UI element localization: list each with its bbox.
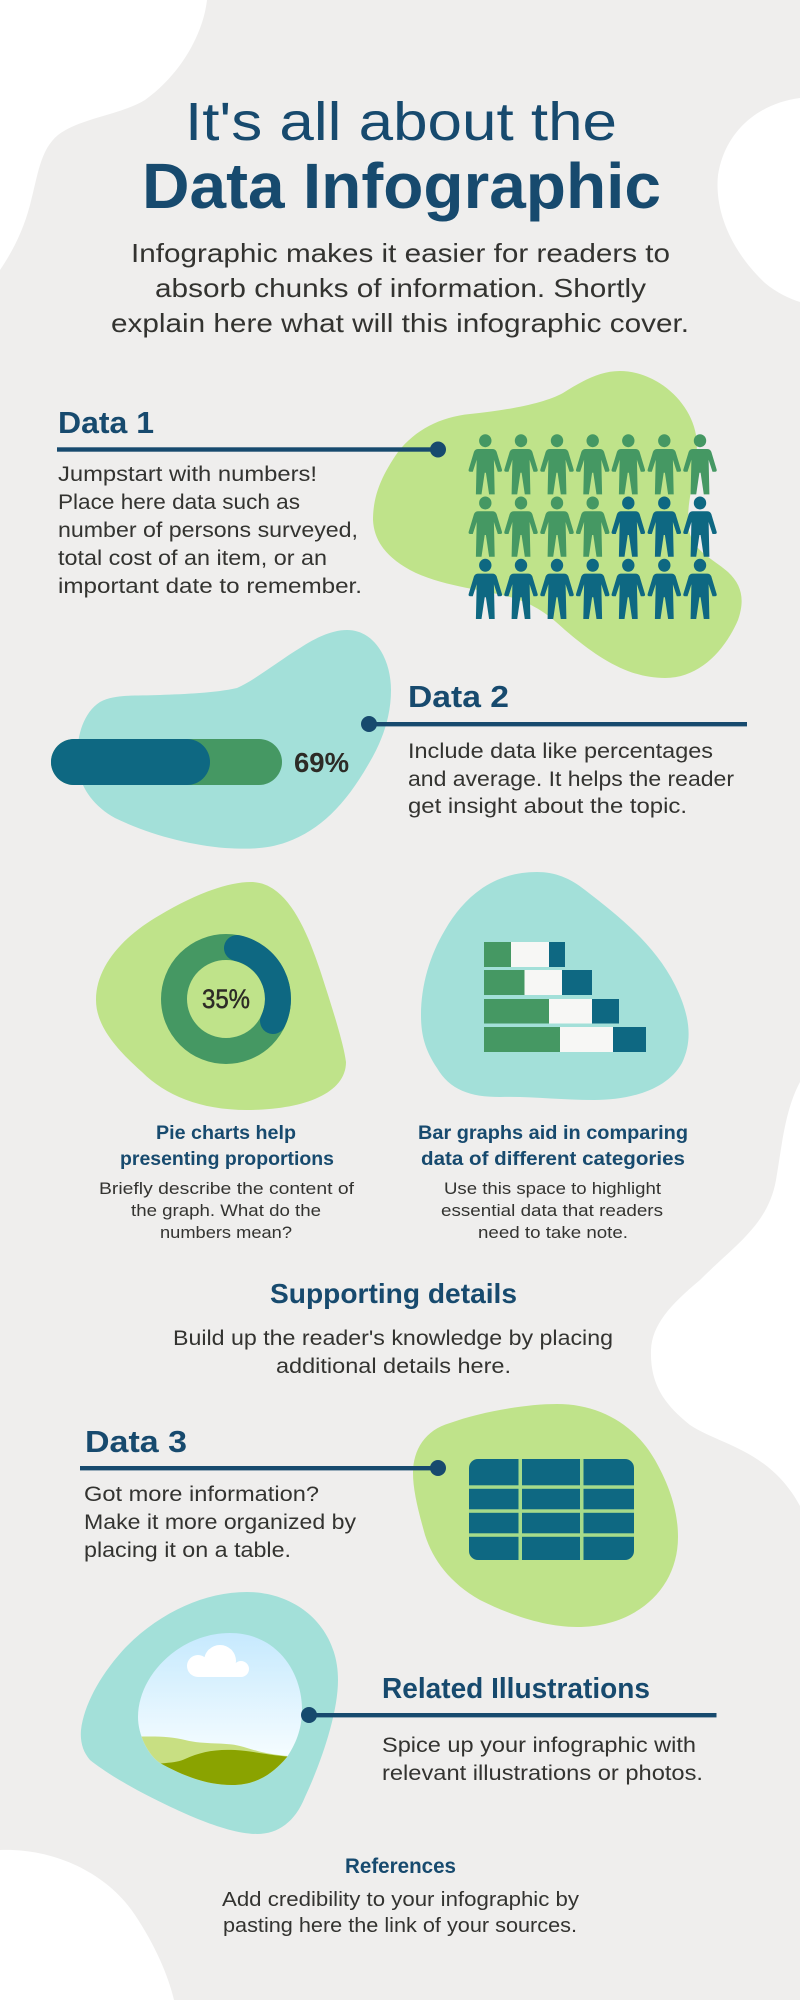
references text: pasting here the link of your sources. [223,1915,577,1937]
pie text [99,1179,354,1242]
panel: data 3 [80,1404,678,1627]
table icon [469,1459,634,1560]
green blob [373,371,742,678]
heading: references: References [345,1855,456,1878]
related text: Spice up your infographic with [382,1734,696,1757]
panel: references [222,1855,579,1937]
heading: supporting details: Supporting details [270,1278,517,1309]
stacked bars [484,942,646,1052]
data 1 text: number of persons surveyed, [58,519,358,542]
data 2 text: Include data like percentages [408,740,713,763]
teal blob [421,872,689,1100]
bar text: Use this space to highlight [444,1179,661,1198]
data 3 text: placing it on a table. [84,1539,291,1562]
related text: relevant illustrations or photos. [382,1762,703,1785]
connector line and dot [361,716,747,732]
data 3 text: Make it more organized by [84,1511,357,1534]
bar heading: Bar graphs aid in comparing [418,1123,688,1144]
data 2 text: and average. It helps the reader [408,768,734,791]
panel: pie chart [96,882,354,1242]
connector line and dot [301,1707,716,1723]
panel: supporting details [173,1278,613,1378]
supporting text [173,1327,613,1378]
pie heading: presenting proportions [120,1149,334,1170]
connector line and dot [57,442,446,458]
intro text: Infographic makes it easier for readers to [131,238,670,268]
teal blob [81,1592,338,1834]
title [142,92,661,222]
intro text: explain here what will this infographic cover. [111,308,689,338]
data 1 text: important date to remember. [58,575,362,598]
landscape illustration [138,1633,302,1785]
pie text: numbers mean? [160,1223,292,1242]
bar heading: data of different categories [421,1149,685,1170]
panel: data 2 [51,630,747,849]
references text: Add credibility to your infographic by [222,1889,579,1911]
panel: data 1 [57,371,742,678]
data 1 text: Place here data such as [58,491,300,514]
bar text: need to take note. [478,1223,628,1242]
value: 69%: 69% [294,747,349,778]
teal blob [77,630,391,849]
related text [382,1734,703,1785]
progress bar [51,739,282,785]
title: It's all about the [185,92,617,152]
data 2 text: get insight about the topic. [408,795,687,818]
heading: data 3: Data 3 [85,1424,187,1459]
data 1 text [58,463,362,598]
cloud [187,1645,249,1677]
intro text [111,238,689,338]
pie text: Briefly describe the content of [99,1179,354,1198]
supporting text: Build up the reader's knowledge by placing [173,1327,613,1350]
panel: related illustrations [81,1592,716,1834]
bar heading [418,1123,688,1170]
data 1 text: total cost of an item, or an [58,547,327,570]
heading: related illustrations: Related Illustrations [382,1673,650,1705]
data 2 text [408,740,734,818]
donut chart [174,947,278,1051]
data 3 text: Got more information? [84,1483,319,1506]
bar text: essential data that readers [441,1201,663,1220]
heading: data 2: Data 2 [408,679,509,714]
connector line and dot [80,1460,446,1476]
people pictogram [469,434,717,619]
intro text: absorb chunks of information. Shortly [155,273,646,303]
bar text [441,1179,663,1242]
data 1 text: Jumpstart with numbers! [58,463,317,486]
heading: data 1: Data 1 [58,405,154,440]
green blob [96,882,346,1110]
value: 35%: 35% [202,984,250,1014]
data 3 text [84,1483,357,1562]
panel: bar graph [418,872,689,1242]
references text [222,1889,579,1937]
pie heading [120,1123,334,1170]
green blob [413,1404,678,1627]
pie text: the graph. What do the [131,1201,321,1220]
supporting text: additional details here. [276,1355,511,1378]
title: Data Infographic [142,150,661,222]
pie heading: Pie charts help [156,1123,296,1144]
